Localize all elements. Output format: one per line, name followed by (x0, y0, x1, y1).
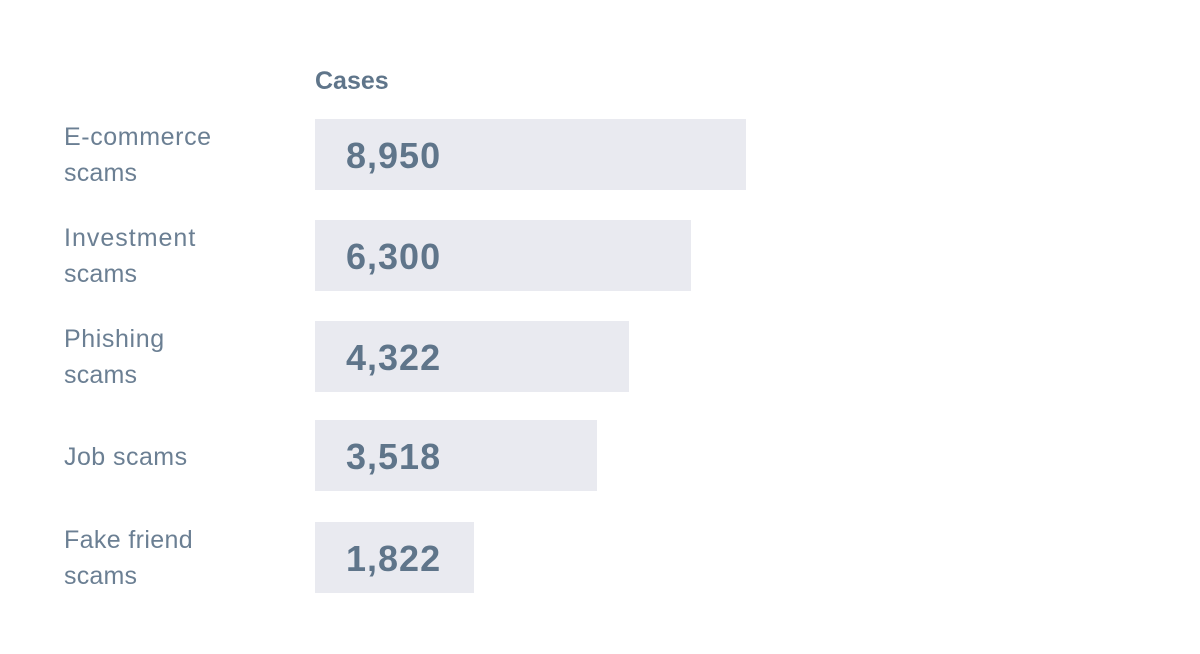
bar: Job scams (315, 420, 597, 491)
label: Investment scams (64, 224, 196, 288)
label: Investment scams: scams (64, 260, 137, 288)
column heading: Cases: Cases (315, 67, 389, 95)
bar: Investment scams: 6,300 (346, 236, 441, 277)
label: Fake friend scams: scams (64, 562, 137, 590)
bar: Fake friend scams (315, 522, 474, 593)
label: Phishing scams: scams (64, 361, 137, 389)
bar: Phishing scams: 4,322 (346, 337, 441, 378)
label: E-commerce scams (64, 123, 212, 187)
bar: Job scams: 3,518 (346, 436, 441, 477)
bar: Fake friend scams: 1,822 (346, 538, 441, 579)
label: Investment scams: Investment (64, 224, 196, 252)
label: Phishing scams: Phishing (64, 325, 165, 353)
label: E-commerce scams: scams (64, 159, 137, 187)
label: Fake friend scams: Fake friend (64, 526, 193, 554)
bar: E-commerce scams (315, 119, 746, 190)
label: Job scams: Job scams (64, 443, 188, 471)
label: Phishing scams (64, 325, 165, 389)
bar: Investment scams (315, 220, 691, 291)
bar: E-commerce scams: 8,950 (346, 135, 441, 176)
label: E-commerce scams: E-commerce (64, 123, 212, 151)
label: Fake friend scams (64, 526, 193, 590)
bar: Phishing scams (315, 321, 629, 392)
